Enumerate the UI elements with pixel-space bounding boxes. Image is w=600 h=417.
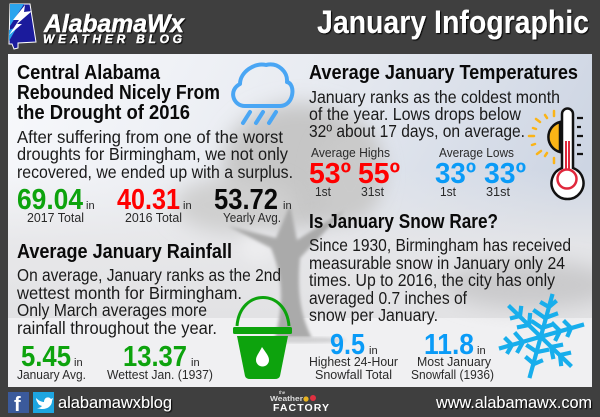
stat: average lows: 31st: [486, 184, 510, 199]
stat: average highs: [309, 145, 400, 199]
text block: snow per January.: [309, 305, 438, 325]
text block: of the year. Lows drops below: [309, 104, 521, 124]
logo: The Weather Factory: Weather: [270, 394, 303, 403]
icon: Facebook: f: [14, 394, 21, 416]
social handle: alabamawxblog: [58, 393, 172, 412]
stat: average highs: 1st: [315, 184, 331, 199]
stat: average lows: Average Lows: [439, 145, 514, 160]
tagline: WEATHER BLOG: [43, 32, 182, 46]
text block: times. Up to 2016, the city has only: [309, 270, 555, 290]
icon: Twitter: [33, 392, 54, 413]
stat: January average: 5.45: [21, 341, 71, 373]
panel: is January snow rare: [309, 211, 582, 382]
heading: Rebounded Nicely From: [17, 82, 220, 104]
stat: wettest January: in: [191, 357, 200, 369]
panel: winter tree photo background: [8, 54, 600, 387]
text block: 32º about 17 days, on average.: [309, 121, 525, 141]
stat: average lows: 1st: [440, 184, 456, 199]
text block: measurable snow in January only 24: [309, 253, 565, 273]
text block: [309, 235, 571, 325]
stat: most January snowfall: Most January: [417, 354, 491, 369]
stat: 2016 total: 2016 Total: [125, 210, 182, 225]
stat: 2016 total: 40.31: [117, 184, 180, 216]
icon: sun and thermometer: [529, 109, 584, 199]
stat: wettest January: Wettest Jan. (1937): [107, 367, 213, 382]
stat: highest 24-hour snowfall: [309, 329, 399, 382]
stat: highest 24-hour snowfall: Highest 24-Hour: [309, 354, 399, 369]
stat: most January snowfall: Snowfall (1936): [411, 367, 494, 382]
heading: Average January Temperatures: [309, 62, 578, 84]
website address: www.alabamawx.com: [435, 393, 592, 412]
text block: recovered, we ended up with a surplus.: [17, 162, 293, 182]
heading: the Drought of 2016: [17, 102, 190, 124]
stat: 2017 total: in: [86, 200, 95, 212]
stat: January average: [17, 341, 86, 382]
stat: January average: in: [74, 357, 83, 369]
heading: [17, 62, 220, 124]
stat: most January snowfall: 11.8: [424, 329, 474, 361]
text block: droughts for Birmingham, we not only: [17, 144, 288, 164]
stat: average highs: Average Highs: [311, 145, 390, 160]
text block: January ranks as the coldest month: [309, 87, 560, 107]
stat: wettest January: [107, 341, 213, 382]
stat: most January snowfall: [411, 329, 494, 382]
text block: After suffering from one of the worst: [17, 127, 283, 147]
stat: yearly average: 53.72: [214, 184, 278, 216]
stat: highest 24-hour snowfall: Snowfall Total: [315, 367, 392, 382]
stat: highest 24-hour snowfall: in: [369, 345, 378, 357]
text block: wettest month for Birmingham.: [16, 283, 242, 303]
stat: average highs: 55º: [358, 158, 400, 190]
stat: 2017 total: 69.04: [17, 184, 83, 216]
stat: average lows: [435, 145, 526, 199]
panel: average January rainfall: [16, 241, 292, 382]
heading: Central Alabama: [17, 62, 161, 84]
stat: 2017 total: 2017 Total: [27, 210, 84, 225]
text block: [309, 87, 560, 141]
stat: average highs: 53º: [309, 158, 351, 190]
stat: average lows: 33º: [484, 158, 526, 190]
logo: AlabamaWx Weather Blog: [9, 4, 185, 49]
text block: rainfall throughout the year.: [17, 318, 217, 338]
logo: The Weather Factory: FACTORY: [273, 402, 329, 414]
text block: On average, January ranks as the 2nd: [17, 265, 281, 285]
stat: average highs: 31st: [361, 184, 384, 199]
panel: drought rebound: [17, 62, 293, 225]
text block: [17, 127, 293, 182]
stat: 2016 total: in: [183, 200, 192, 212]
stat: highest 24-hour snowfall: 9.5: [330, 329, 365, 361]
text block: [16, 265, 281, 338]
heading: Average January Rainfall: [17, 241, 232, 263]
logo: The Weather Factory: the: [279, 390, 286, 395]
icon: snowflake: [501, 296, 582, 376]
text block: Only March averages more: [17, 300, 207, 320]
stat: wettest January: 13.37: [123, 341, 187, 373]
wordmark: AlabamaWx: [43, 10, 185, 38]
stat: January average: January Avg.: [17, 367, 86, 382]
stat: yearly average: Yearly Avg.: [223, 210, 281, 225]
text block: averaged 0.7 inches of: [309, 288, 467, 308]
icon: green bucket with water drop: [233, 298, 292, 379]
stat: most January snowfall: in: [477, 345, 486, 357]
icon: Facebook: [8, 392, 29, 416]
panel: average January temperatures: [309, 62, 584, 199]
text block: Since 1930, Birmingham has received: [309, 235, 571, 255]
stat: yearly average: in: [283, 200, 292, 212]
stat: average lows: 33º: [435, 158, 476, 190]
icon: rain cloud: [233, 64, 292, 123]
icon: Alabama state with lightning bolt: [9, 4, 36, 49]
logo: The Weather Factory: [270, 390, 329, 414]
heading: Is January Snow Rare?: [309, 211, 498, 233]
